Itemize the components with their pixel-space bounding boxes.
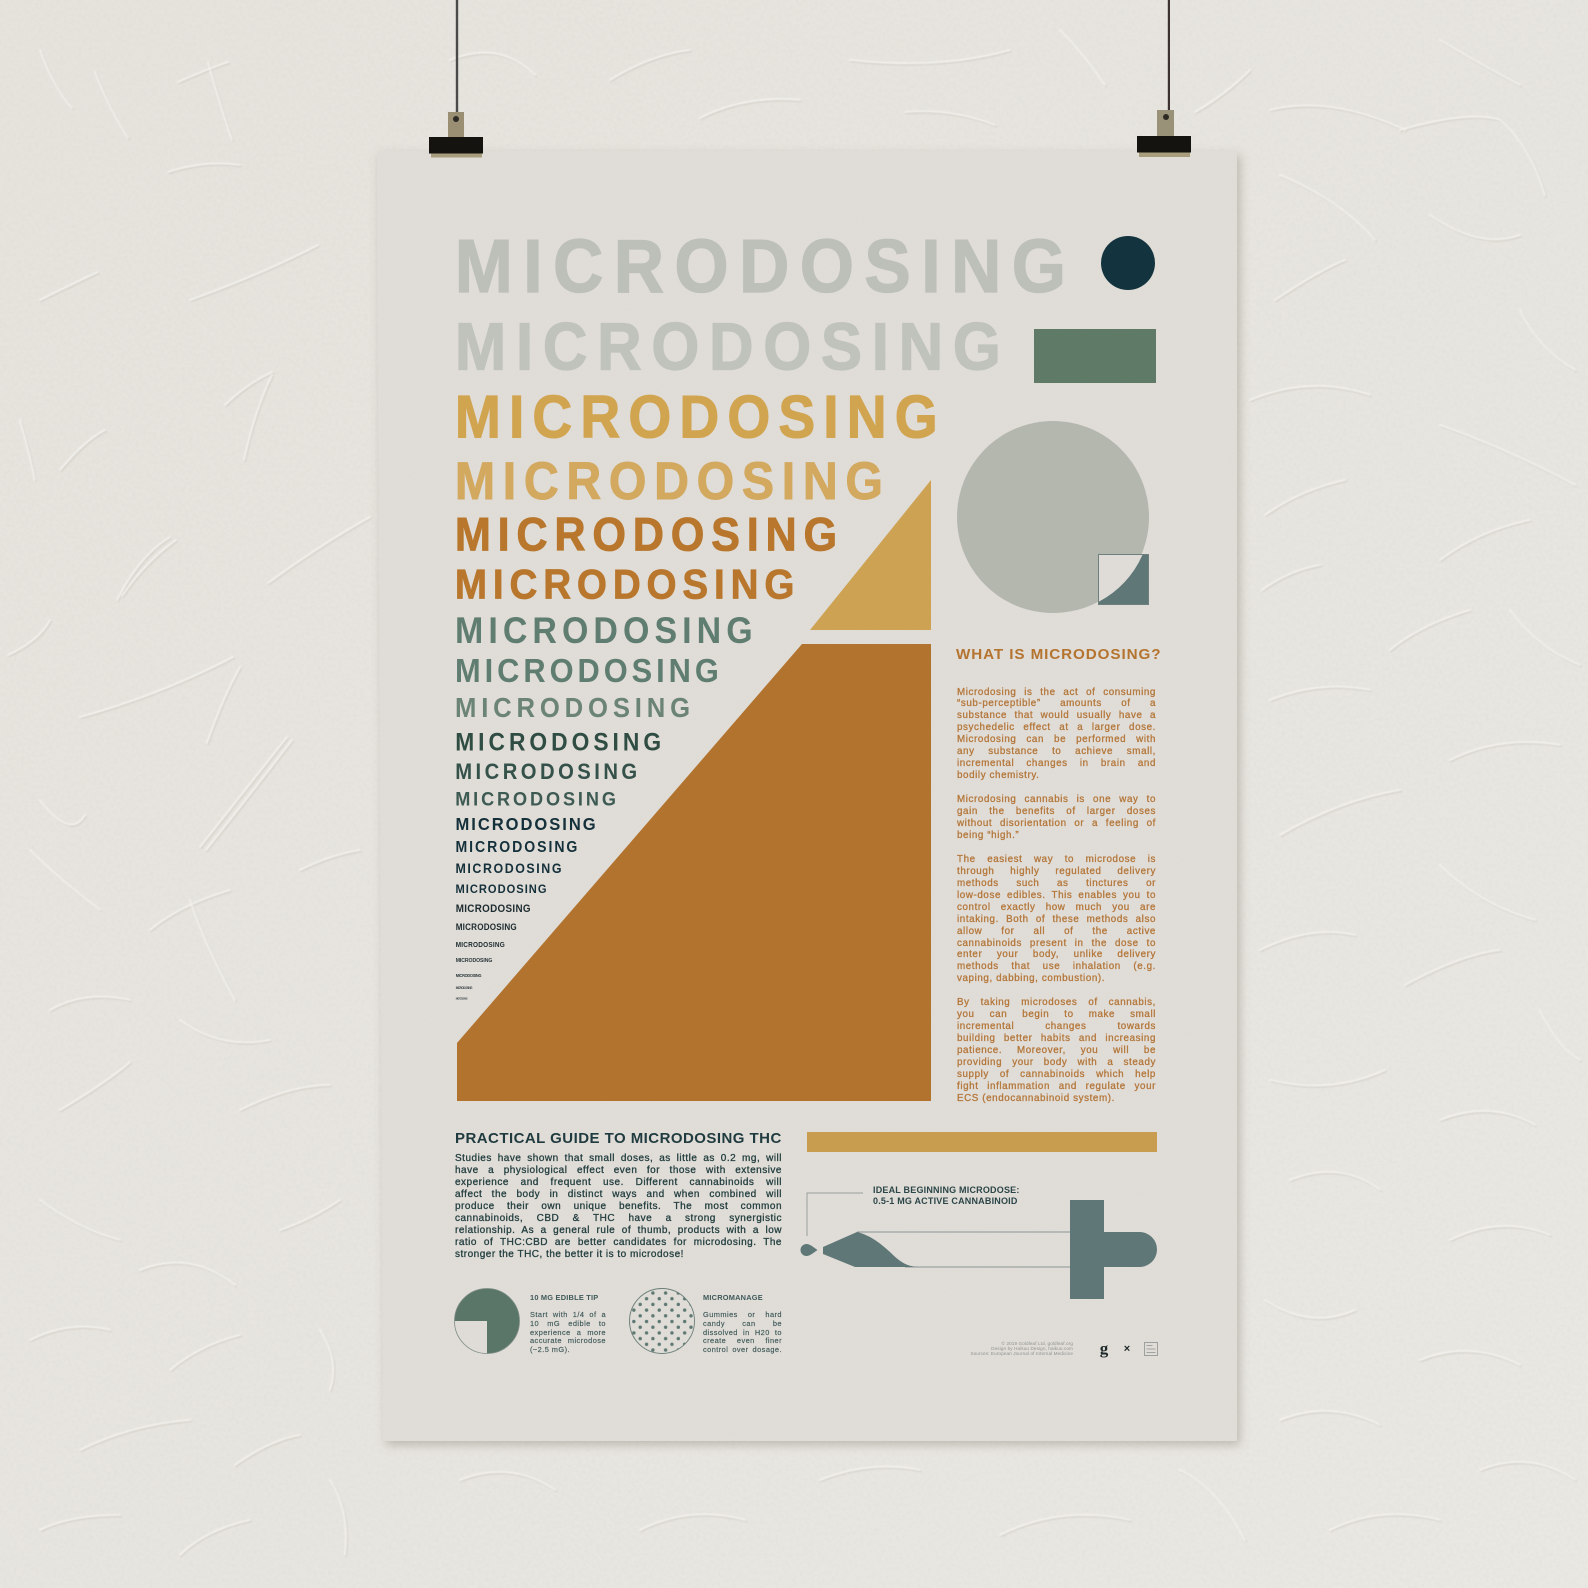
text block: edible tip bbox=[530, 1310, 606, 1354]
heading: what is microdosing: WHAT IS MICRODOSING? bbox=[956, 646, 1161, 663]
title stack: repeated MICRODOSING shrinking: MICRODOSING bbox=[456, 904, 531, 915]
text block: what is microdosing body: allow for all of the active bbox=[957, 926, 1156, 937]
text block: what is microdosing body: By taking microdoses of cannabis, bbox=[957, 997, 1156, 1008]
text block: edible tip: experience a more bbox=[530, 1328, 606, 1336]
footer credits: Sources: European Journal of Internal Medicine bbox=[970, 1350, 1073, 1356]
title stack: repeated MICRODOSING shrinking: MICRODOSING bbox=[456, 998, 468, 1001]
logo: times symbol: × bbox=[1124, 1343, 1130, 1355]
title stack: repeated MICRODOSING shrinking: MICRODOSING bbox=[455, 652, 719, 689]
text block: what is microdosing body: incremental changes towards bbox=[957, 1021, 1156, 1032]
title stack: repeated MICRODOSING shrinking: MICRODOSING bbox=[455, 560, 794, 608]
shape: gold bar bbox=[807, 1132, 1157, 1152]
text block: what is microdosing body: control exactly how much you are bbox=[957, 902, 1156, 913]
title stack: repeated MICRODOSING shrinking: MICRODOSING bbox=[455, 224, 1066, 308]
text block: practical guide body: relationship. As a general rule of thumb, products with a low bbox=[455, 1225, 782, 1236]
text block: what is microdosing body: ECS (endocannabinoid system). bbox=[957, 1093, 1115, 1104]
text block: practical guide body bbox=[455, 1153, 782, 1260]
pie icon: 10 mg edible bbox=[454, 1288, 520, 1354]
title stack: repeated MICRODOSING shrinking: MICRODOSING bbox=[455, 309, 1001, 384]
text block: practical guide body: experience and frequent use. Different cannabinoids will bbox=[455, 1177, 782, 1188]
text block: what is microdosing body: through highly regulated delivery bbox=[957, 866, 1156, 877]
text block: what is microdosing body: fight inflammation and regulate your bbox=[957, 1081, 1156, 1092]
heading: 10 mg edible tip: 10 MG EDIBLE TIP bbox=[530, 1293, 598, 1302]
text block: practical guide body: cannabinoids, CBD & THC have a strong synergistic bbox=[455, 1213, 782, 1224]
label: ideal beginning microdose bbox=[873, 1185, 1020, 1206]
title stack: repeated MICRODOSING shrinking: MICRODOSING bbox=[455, 692, 690, 723]
text block: practical guide body: Studies have shown that small doses, as little as 0.2 mg, will bbox=[455, 1153, 782, 1164]
text block: practical guide body: have a physiological effect even for those with extensive bbox=[455, 1165, 782, 1176]
title stack: repeated MICRODOSING shrinking: MICRODOSING bbox=[456, 861, 561, 876]
label: ideal beginning microdose: 0.5-1 MG ACTIVE CANNABINOID bbox=[873, 1196, 1018, 1206]
footer credits bbox=[970, 1340, 1073, 1356]
shape: large orange polygon bbox=[457, 644, 931, 1101]
text block: what is microdosing body: enter your body, unlike delivery bbox=[957, 949, 1156, 960]
dropper bulb bbox=[1070, 1200, 1157, 1299]
leader line bbox=[807, 1193, 863, 1236]
footer credits: © 2019 Goldleaf Ltd, goldleaf.org bbox=[1002, 1340, 1073, 1346]
text block: micromanage: dissolved in H20 to bbox=[703, 1328, 782, 1336]
text block: what is microdosing body: any substance to achieve small, bbox=[957, 746, 1156, 757]
title stack: repeated MICRODOSING shrinking: MICRODOSING bbox=[455, 384, 938, 451]
dropper liquid bbox=[823, 1232, 919, 1267]
text block: what is microdosing body: Microdosing can be performed with bbox=[957, 734, 1156, 745]
text block: what is microdosing body: substance that would usually have a bbox=[957, 710, 1156, 721]
title stack: repeated MICRODOSING shrinking: MICRODOSING bbox=[456, 986, 473, 990]
text block: what is microdosing body: intaking. Both of these methods also bbox=[957, 914, 1156, 925]
text block: what is microdosing body: methods that use inhalation (e.g. bbox=[957, 961, 1156, 972]
title stack: repeated MICRODOSING shrinking: MICRODOSING bbox=[455, 508, 837, 561]
text block: practical guide body: produce their own unique benefits. The most common bbox=[455, 1201, 782, 1212]
title stack: repeated MICRODOSING shrinking: MICRODOSING bbox=[455, 451, 883, 510]
label: ideal beginning microdose: IDEAL BEGINNING MICRODOSE: bbox=[873, 1185, 1020, 1195]
text block: practical guide body: affect the body in distinct ways and when combined will bbox=[455, 1189, 782, 1200]
heading: micromanage: MICROMANAGE bbox=[703, 1293, 763, 1302]
text block: micromanage bbox=[703, 1310, 782, 1354]
text block: edible tip: (~2.5 mG). bbox=[530, 1345, 570, 1354]
title stack: repeated MICRODOSING shrinking: MICRODOSING bbox=[455, 789, 616, 811]
text block: what is microdosing body: low-dose edibles. This enables you to bbox=[957, 890, 1156, 901]
title stack: repeated MICRODOSING shrinking: MICRODOSING bbox=[456, 813, 596, 834]
text block: micromanage: Gummies or hard bbox=[703, 1310, 782, 1319]
text block: practical guide body: ratio of THC:CBD are better candidates for microdosing. The bbox=[455, 1237, 782, 1248]
right binder clip bbox=[1137, 0, 1191, 157]
text block: what is microdosing body: Microdosing cannabis is one way to bbox=[957, 794, 1156, 805]
text block: what is microdosing body: supply of cannabinoids which help bbox=[957, 1069, 1156, 1080]
logo: g: g bbox=[1100, 1339, 1109, 1358]
text block: micromanage: candy can be bbox=[703, 1319, 782, 1328]
text block: what is microdosing body: bodily chemistry. bbox=[957, 770, 1039, 781]
text block: what is microdosing body: Microdosing is the act of consuming bbox=[957, 686, 1156, 698]
poster sheet bbox=[377, 151, 1237, 1441]
title stack: repeated MICRODOSING shrinking: MICRODOSING bbox=[456, 973, 481, 978]
text block: what is microdosing body: incremental changes in brain and bbox=[957, 758, 1156, 769]
text block: what is microdosing body: you can begin to make small bbox=[957, 1009, 1156, 1020]
text block: what is microdosing body: building better habits and increasing bbox=[957, 1033, 1156, 1044]
text block: edible tip: accurate microdose bbox=[530, 1336, 606, 1345]
text block: what is microdosing body: cannabinoids present in the dose to bbox=[957, 938, 1156, 949]
title stack: repeated MICRODOSING shrinking: MICRODOSING bbox=[456, 958, 492, 964]
shape: green rectangle bbox=[1034, 329, 1156, 383]
shape: navy circle bbox=[1101, 236, 1155, 290]
footer credits: Design by Haikuu Design, haikuu.com bbox=[991, 1346, 1073, 1350]
text block: what is microdosing body: gain the benefits of larger doses bbox=[957, 806, 1156, 817]
dropper diagram bbox=[800, 1193, 1157, 1299]
text block: micromanage: create even finer bbox=[703, 1336, 782, 1345]
text block: what is microdosing body: patience. Moreover, you will be bbox=[957, 1045, 1156, 1056]
text block: what is microdosing body: vaping, dabbing, combustion). bbox=[957, 973, 1105, 984]
text block: what is microdosing body: methods such as tinctures or bbox=[957, 878, 1156, 889]
heading: practical guide: PRACTICAL GUIDE TO MICRODOSING THC bbox=[455, 1130, 782, 1147]
title stack: repeated MICRODOSING shrinking: MICRODOSING bbox=[455, 729, 661, 757]
text block: what is microdosing body: providing your body with a steady bbox=[957, 1057, 1156, 1068]
title stack: repeated MICRODOSING shrinking: MICRODOSING bbox=[456, 883, 546, 896]
text block: edible tip: Start with 1/4 of a bbox=[530, 1310, 606, 1319]
text block: what is microdosing body: psychedelic effect at a larger dose. bbox=[957, 722, 1156, 733]
text block: what is microdosing body: without disorientation or a feeling of bbox=[957, 818, 1156, 829]
text block: what is microdosing body: The easiest way to microdose is bbox=[957, 854, 1156, 865]
logo: document icon bbox=[1144, 1342, 1158, 1356]
text block: what is microdosing body bbox=[956, 686, 1156, 1104]
title stack: repeated MICRODOSING shrinking: MICRODOSING bbox=[456, 942, 505, 949]
title stack: repeated MICRODOSING shrinking: MICRODOSING bbox=[455, 760, 637, 784]
title stack: repeated MICRODOSING shrinking: MICRODOSING bbox=[456, 840, 577, 856]
title stack: repeated MICRODOSING shrinking bbox=[455, 224, 1066, 1001]
shape: grey circle with square inset bbox=[957, 421, 1149, 613]
title stack: repeated MICRODOSING shrinking: MICRODOSING bbox=[456, 922, 517, 932]
left binder clip bbox=[429, 0, 483, 158]
title stack: repeated MICRODOSING shrinking: MICRODOSING bbox=[455, 610, 753, 652]
text block: what is microdosing body: “sub-perceptible” amounts of a bbox=[957, 698, 1156, 709]
droplet bbox=[800, 1244, 818, 1256]
text block: what is microdosing body: being “high.” bbox=[957, 830, 1019, 841]
shape: gold triangle bbox=[810, 480, 931, 630]
text block: micromanage: control over dosage. bbox=[703, 1345, 782, 1354]
dotted circle icon: micromanage bbox=[630, 1288, 694, 1354]
text block: edible tip: 10 mG edible to bbox=[530, 1319, 606, 1328]
dropper glass outline bbox=[857, 1232, 1070, 1267]
text block: practical guide body: stronger the THC, the better it is to microdose! bbox=[455, 1249, 684, 1260]
